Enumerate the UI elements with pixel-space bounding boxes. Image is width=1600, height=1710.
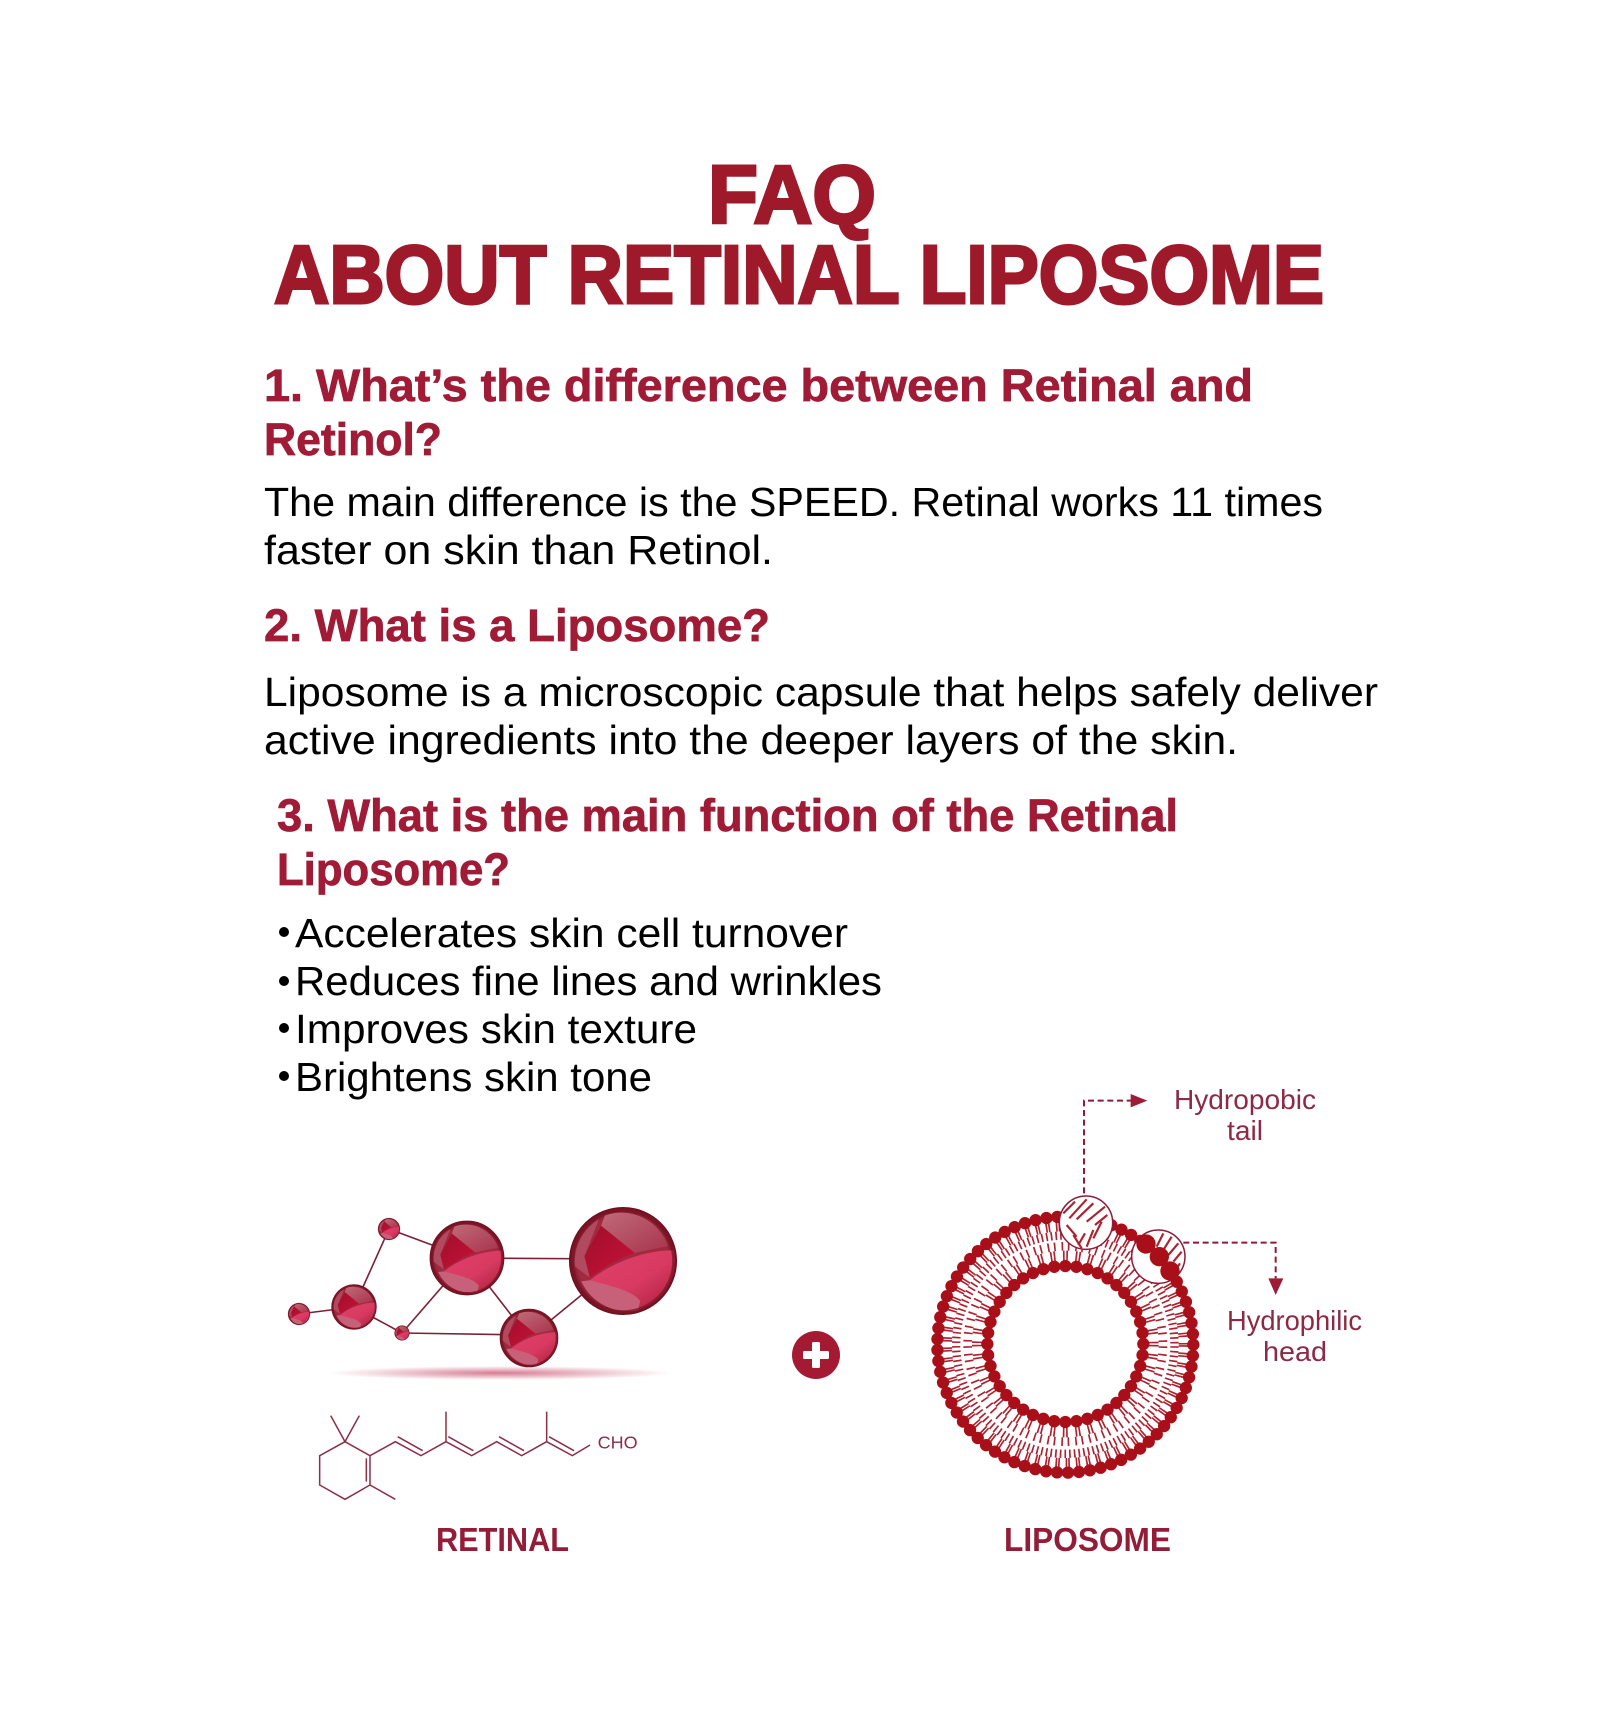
- retinal skeletal formula: [320, 1412, 638, 1499]
- outer tails: [947, 1227, 1183, 1462]
- magnifier: hydrophilic head: [1132, 1230, 1185, 1283]
- question 3 heading: 3. What is the main function of the Retinal: [277, 790, 1178, 841]
- answer 1 text: faster on skin than Retinol.: [264, 527, 773, 573]
- liposome diagram: [937, 1094, 1283, 1473]
- faq 2: [264, 600, 1378, 763]
- liposome caption: LIPOSOME: [1004, 1521, 1171, 1558]
- label: hydrophobic tail: Hydropobic: [1174, 1084, 1316, 1115]
- arrow: hydrophilic head: [1183, 1243, 1283, 1295]
- inner tails: [968, 1246, 1163, 1442]
- answer 1 text: [264, 479, 1323, 573]
- answer 2 text: [264, 669, 1378, 763]
- retinal caption: RETINAL: [436, 1521, 569, 1558]
- molecule shadow: [328, 1366, 672, 1380]
- faq 1: [264, 360, 1323, 573]
- bullet list: Improves skin texture: [295, 1006, 697, 1052]
- title: FAQ: [708, 148, 876, 241]
- plus icon: [792, 1331, 840, 1379]
- question 3 heading: [277, 790, 1178, 895]
- question 3 heading: Liposome?: [277, 844, 510, 895]
- question 2 heading: 2. What is a Liposome?: [264, 600, 770, 651]
- question 1 heading: 1. What’s the difference between Retinal and: [264, 360, 1253, 411]
- bullet list: Accelerates skin cell turnover: [295, 910, 848, 956]
- magnifier: hydrophobic tail: [1059, 1196, 1113, 1249]
- bullet list: Reduces fine lines and wrinkles: [295, 958, 882, 1004]
- inner heads: [987, 1266, 1143, 1422]
- answer 2 text: active ingredients into the deeper layers of the skin.: [264, 717, 1238, 763]
- question 1 heading: [264, 360, 1253, 465]
- bullet list: [279, 910, 882, 1100]
- retinal molecule illustration: [288, 1208, 676, 1380]
- label: hydrophilic head: [1227, 1305, 1362, 1367]
- molecule bonds: [299, 1229, 623, 1338]
- label: hydrophilic head: head: [1263, 1336, 1327, 1367]
- answer 2 text: Liposome is a microscopic capsule that helps safely deliver: [264, 669, 1378, 715]
- label: hydrophilic head: Hydrophilic: [1227, 1305, 1362, 1336]
- label: hydrophobic tail: tail: [1227, 1115, 1263, 1146]
- answer 1 text: The main difference is the SPEED. Retinal works 11 times: [264, 479, 1323, 525]
- question 1 heading: Retinol?: [264, 414, 442, 465]
- molecule spheres: [288, 1208, 676, 1367]
- faq 3: [277, 790, 1178, 1100]
- CHO label: CHO: [598, 1432, 638, 1452]
- arrow: hydrophobic tail: [1084, 1094, 1147, 1193]
- outer heads: [937, 1217, 1193, 1473]
- title: [274, 148, 1324, 321]
- title: ABOUT RETINAL LIPOSOME: [274, 228, 1324, 321]
- bullet list: Brightens skin tone: [295, 1054, 652, 1100]
- label: hydrophobic tail: [1174, 1084, 1316, 1146]
